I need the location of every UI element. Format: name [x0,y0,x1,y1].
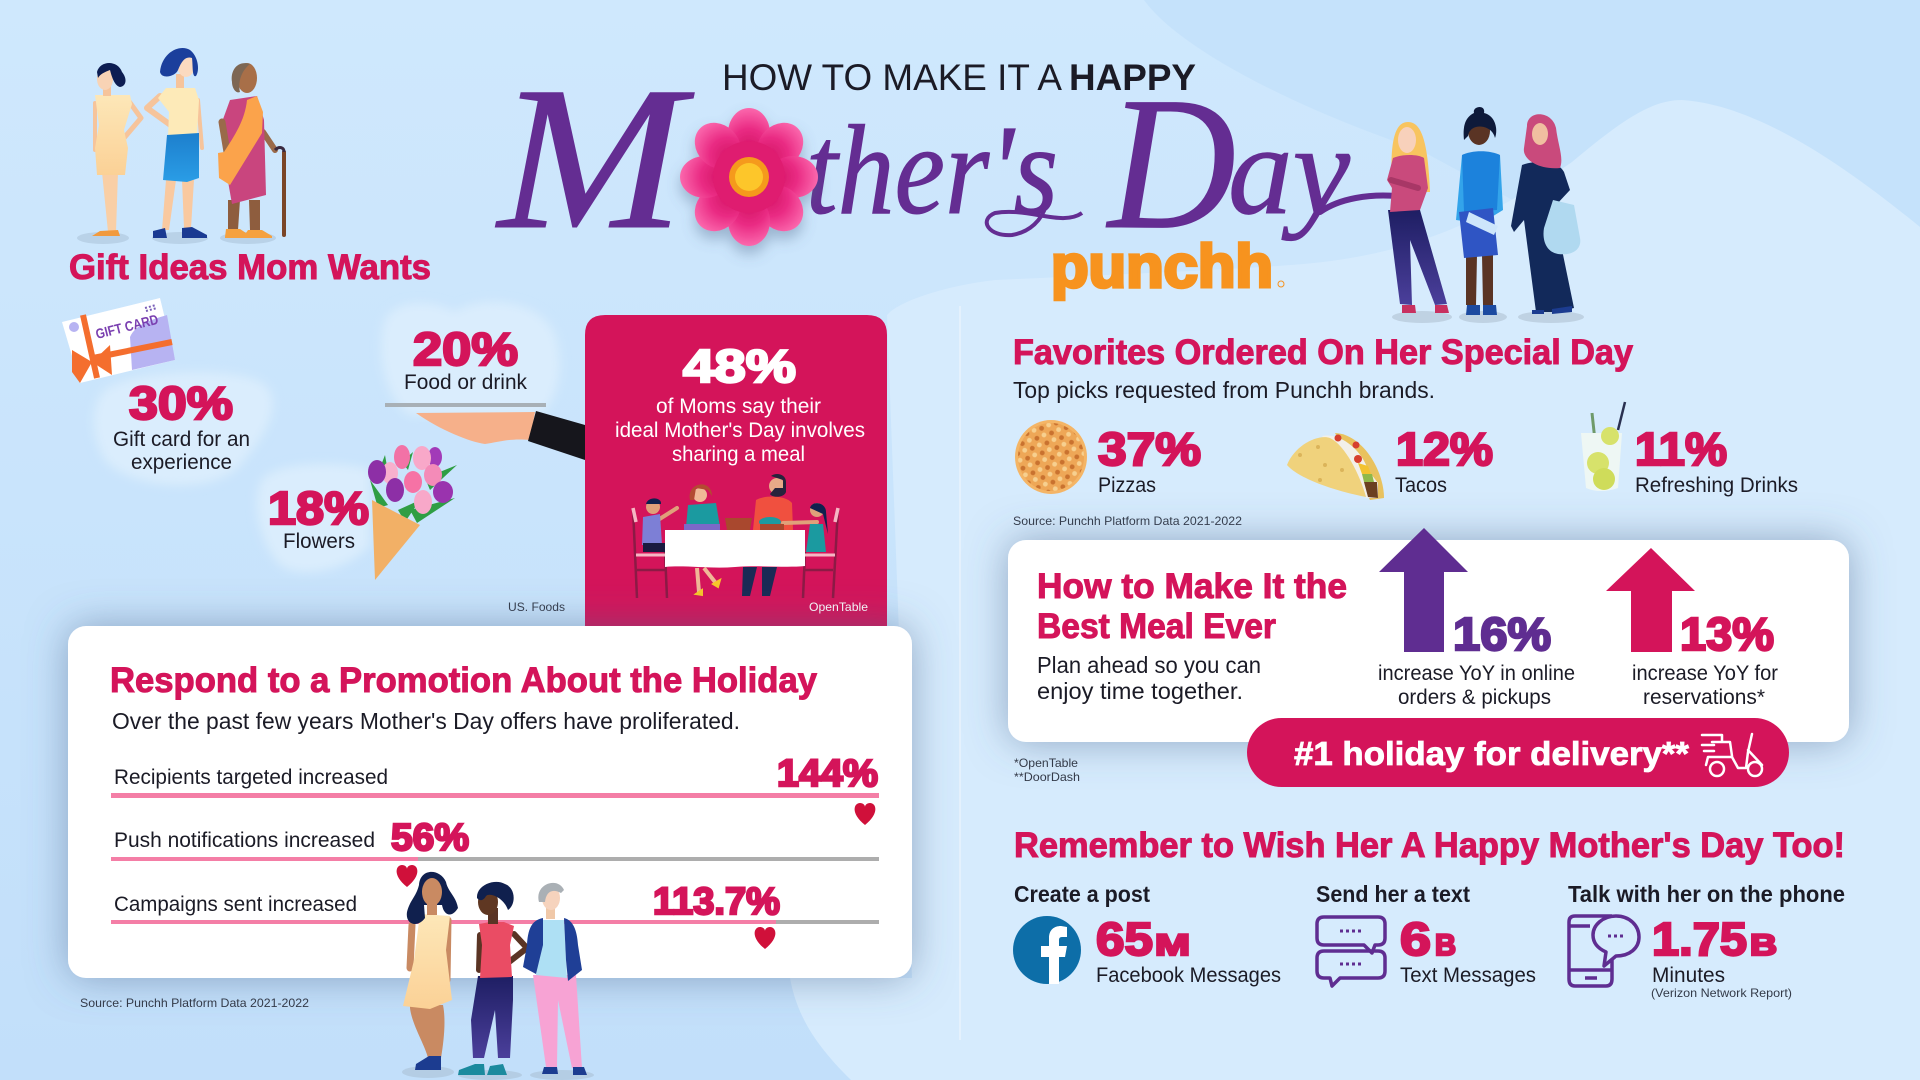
subheading: Over the past few years Mother's Day offers have proliferated. [112,708,740,734]
stat: 65M: 65 [1096,913,1153,965]
stat: 16 percent: 16% [1453,608,1551,660]
callout: number one holiday for delivery [1247,718,1789,787]
woman hijab [1511,162,1574,312]
icon: bouquet [368,445,457,580]
label: reservations: increase YoY for [1632,662,1778,685]
label: online orders [1378,662,1575,709]
stat: 6B [1400,913,1456,965]
panel: 20 percent food [381,302,585,460]
source: favorites: Source: Punchh Platform Data 2021-2022 [1013,514,1242,528]
girl [783,522,817,523]
icon: phone and bubble [1569,916,1639,986]
source: promotion: Source: Punchh Platform Data 2021-2022 [80,996,309,1010]
text: moms description: ideal Mother's Day involves [615,419,865,442]
label: gift card [113,428,250,474]
stat: 1.75B: 1.75 [1652,913,1747,965]
item: send her a text [1316,881,1536,987]
source: US Foods: US. Foods [508,600,565,614]
illustration: three women bottom [402,872,594,1080]
stat: 12 percent: 12% [1396,423,1493,475]
panel: 18 percent flowers [257,445,457,580]
row: recipients [111,753,879,825]
label: send her a text: Send her a text [1316,881,1470,907]
woman navy skirt [1466,255,1493,305]
source: OpenTable: OpenTable [809,600,868,614]
label: talk with her: Talk with her on the phone [1568,881,1845,907]
woman blonde [1391,122,1430,192]
row: push notifications [111,817,879,887]
panel: 48 percent of moms [585,315,887,640]
label: tacos: Tacos [1395,474,1447,497]
label: minutes: Minutes [1652,964,1725,987]
panel: respond to a promotion [68,626,912,978]
heading: best meal: How to Make It the [1037,567,1347,606]
panel: 30 percent gift card [62,298,273,485]
panel: best meal ever [1008,528,1849,742]
icon: flower [680,108,818,246]
footnotes [1014,756,1080,784]
label: reservations [1632,662,1778,709]
footnotes: *OpenTable [1014,756,1078,770]
item: create a post [1013,881,1281,987]
label: create a post: Create a post [1014,881,1150,907]
label: flowers: Flowers [283,530,355,553]
table [665,530,805,568]
stat: 48 percent: 48% [683,340,796,392]
icon: facebook [1013,916,1081,984]
blob [257,464,370,572]
illustration: family at table [633,474,838,598]
source: verizon: (Verizon Network Report) [1651,986,1792,1000]
row: push notifications: 56% [391,817,469,859]
label: gift card: experience [131,451,232,474]
label: food: Food or drink [404,371,527,394]
blob [94,372,273,485]
woman [686,503,720,527]
heading: remember: Remember to Wish Her A Happy Mother's Day Too! [1014,826,1845,865]
stat: 37 percent: 37% [1098,423,1201,475]
icon: pizza [1015,420,1087,494]
title script: Mother's Day: ther's [806,99,1058,241]
blob [381,302,560,415]
stat: 1.75B: B [1750,929,1777,962]
row: push notifications: Push notifications increased [114,829,375,852]
label: online orders: orders & pickups [1398,686,1551,709]
stat: 6B: B [1435,929,1456,962]
title script: Mother's Day: ay [1228,99,1350,241]
row: recipients: Recipients targeted increased [114,766,388,789]
heading: gift ideas: Gift Ideas Mom Wants [69,248,431,287]
food [725,518,752,530]
item: talk with her [1568,881,1845,1000]
heading: favorites: Favorites Ordered On Her Special Day [1013,333,1634,372]
label: text messages: Text Messages [1400,964,1536,987]
woman dress [410,1005,444,1058]
icon: gift card: GIFT CARD [94,311,160,342]
text: moms description: of Moms say their [656,395,821,418]
woman 2 [162,180,194,230]
stat: 6B: 6 [1400,913,1431,965]
label: refreshing drinks: Refreshing Drinks [1635,474,1798,497]
row: recipients: 144% [777,753,878,795]
icon: chat bubbles [1317,917,1385,986]
icon: taco [1287,433,1384,500]
woman 3 [228,200,260,230]
logo: punchh: punchh [1051,233,1273,300]
row: campaigns: Campaigns sent increased [114,893,357,916]
footnotes: **DoorDash [1014,770,1080,784]
illustration: three women top right [1387,107,1584,323]
arrow: purple up [1379,528,1468,652]
arrow: crimson up [1606,548,1695,652]
title line: HAPPY [1069,57,1196,98]
stat: 65M [1096,913,1190,965]
stat: 13 percent: 13% [1680,608,1774,660]
text: moms description [615,395,865,466]
icon: serving hand [385,403,585,460]
stat: 18 percent: 18% [268,482,369,534]
item: refreshing drinks [1581,402,1798,497]
heading: respond: Respond to a Promotion About the Holiday [110,661,818,700]
woman 1 [102,172,118,232]
text: moms description: sharing a meal [672,443,805,466]
text: plan ahead: Plan ahead so you can [1037,652,1261,678]
child [658,508,677,520]
row: campaigns [111,881,879,949]
illustration: three women top left [77,48,284,244]
icon: drink [1581,402,1625,491]
heading: best meal: Best Meal Ever [1037,607,1276,646]
stat: 65M: M [1155,929,1190,962]
stat: 30 percent: 30% [129,377,233,429]
title script: Mother's Day: M [495,45,695,272]
text: plan ahead [1037,652,1261,704]
text: plan ahead: enjoy time together. [1037,678,1243,704]
title script: Mother's Day: D [1105,59,1236,269]
item: pizzas [1015,420,1201,497]
subheading: top picks: Top picks requested from Punchh brands. [1013,377,1435,403]
heading: best meal [1037,567,1347,646]
woman grey [533,975,582,1068]
stat: 11 percent: 11% [1635,423,1727,475]
item: tacos [1287,423,1493,500]
label: online orders: increase YoY in online [1378,662,1575,685]
woman red [471,976,513,1058]
stat: 20 percent: 20% [413,323,518,375]
row: campaigns: 113.7% [653,881,780,923]
man [753,497,793,530]
label: pizzas: Pizzas [1098,474,1156,497]
label: reservations: reservations* [1643,686,1765,709]
label: gift card: Gift card for an [113,428,250,451]
icon: gift card [62,298,175,383]
label: facebook messages: Facebook Messages [1096,964,1281,987]
title line: HOW TO MAKE IT A [722,57,1062,98]
icon: delivery scooter [1702,734,1762,776]
title script: Mother's Day [495,45,1396,272]
callout: number one holiday for delivery: #1 holiday for delivery** [1294,735,1689,772]
